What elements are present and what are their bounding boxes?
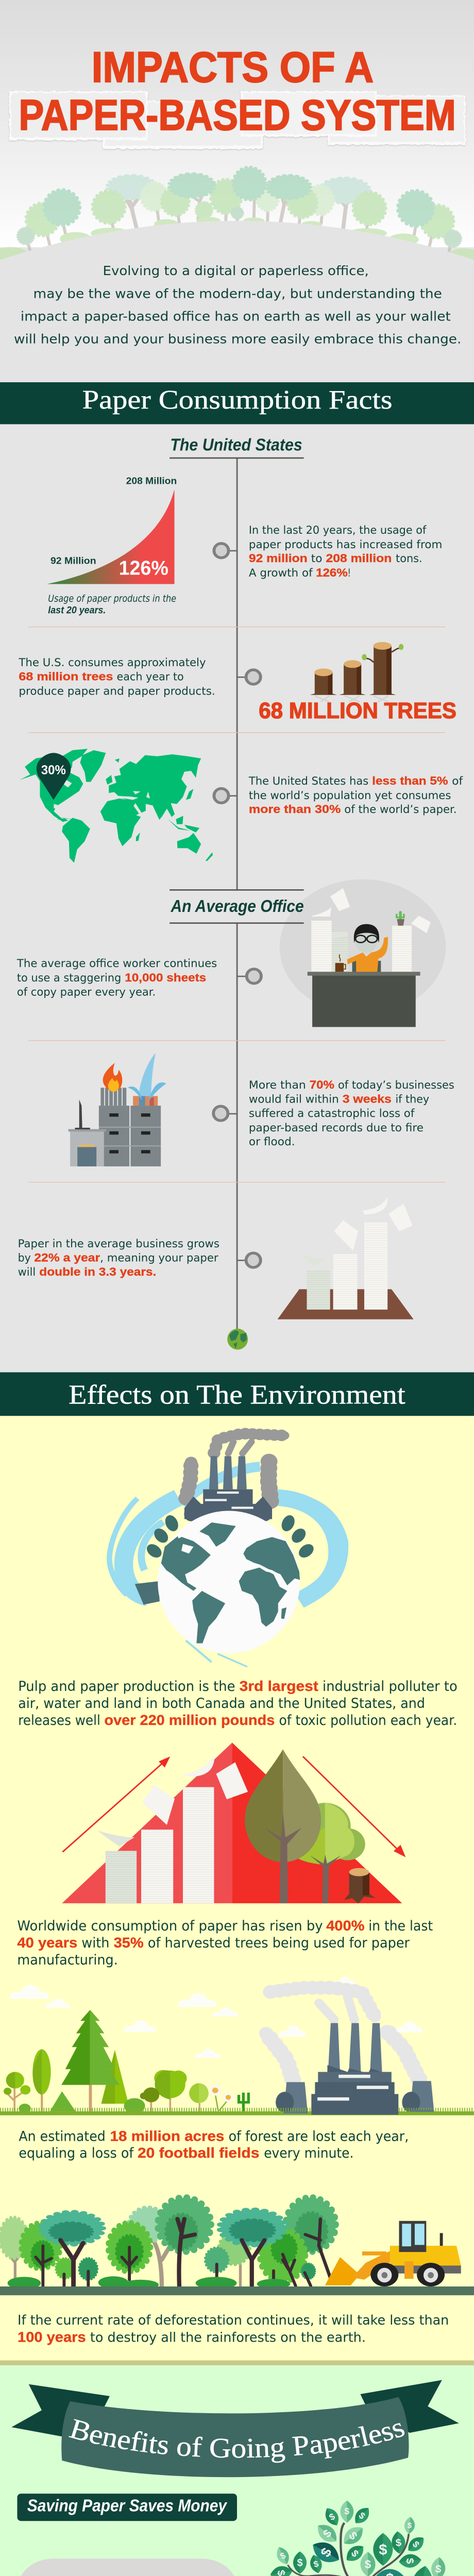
map pin: 30%: 30% — [41, 764, 66, 777]
text: usage growth: paper products has increased from — [249, 539, 442, 551]
illustration: red mountain with paper stacks and trees — [62, 1742, 405, 1904]
intro text — [14, 263, 461, 347]
text: 68 million trees — [18, 657, 215, 698]
text: rainforests — [18, 2313, 449, 2345]
text: usage growth: tons. — [396, 553, 422, 565]
banner: paper consumption facts — [0, 382, 474, 424]
banner: effects on the environment: Effects on The Environment — [69, 1380, 405, 1410]
text: business failure: 70% — [310, 1078, 334, 1091]
timeline node — [238, 969, 261, 984]
panel: effects on the environment — [0, 1329, 474, 1728]
header section — [0, 43, 474, 424]
illustration: money tree: $ — [357, 2510, 367, 2521]
illustration: money tree: $ — [312, 2558, 320, 2569]
text: usage growth: to — [311, 553, 322, 565]
text: business failure: suffered a catastrophic loss of — [249, 1108, 415, 1120]
subheading: saving paper saves money — [17, 2494, 237, 2521]
text: third largest polluter: air, water and land in both Canada and the United States, and — [18, 1696, 425, 1711]
area chart: growth 126%: 126% — [119, 556, 168, 579]
text: third largest polluter: releases well — [18, 1713, 100, 1728]
text: worldwide consumption: with — [81, 1935, 109, 1951]
intro text: Evolving to a digital or paperless office, — [103, 263, 369, 279]
illustration: forest versus factory landscape — [0, 1977, 474, 2115]
illustration: money tree: $ — [346, 2530, 360, 2542]
text: 10,000 sheets: to use a staggering — [17, 972, 121, 985]
illustration: office worker at desk — [280, 879, 446, 1027]
text: us population share: of — [452, 775, 464, 788]
text: worldwide consumption: in the last — [368, 1918, 433, 1934]
text: usage growth: In the last 20 years, the usage of — [249, 524, 427, 537]
text: paper doubles: by — [18, 1252, 31, 1264]
text: rainforests: If the current rate of deforestation continues, it will take less than — [18, 2313, 449, 2328]
torn paper strips behind title — [9, 91, 466, 149]
illustration: money tree: $ — [410, 2539, 421, 2550]
text: 10,000 sheets: The average office worker continues — [16, 958, 217, 970]
text: paper doubles: will — [18, 1266, 36, 1279]
world map — [20, 749, 213, 863]
illustration: growing paper stacks — [278, 1197, 414, 1319]
illustration: money tree: $ — [345, 2506, 350, 2516]
text: us population share: of the world’s paper. — [344, 804, 457, 816]
text: forest acres lost: every minute. — [264, 2145, 353, 2161]
panel: an average office — [16, 879, 454, 1319]
illustration: money tree: $ — [365, 2558, 371, 2571]
text: business failure: if they — [395, 1094, 429, 1106]
illustration: money tree: $ — [407, 2521, 412, 2530]
text: third largest polluter: over 220 million pounds — [104, 1713, 275, 1728]
title: IMPACTS OF A — [92, 43, 374, 91]
hill — [0, 221, 474, 386]
text: us population share — [248, 774, 464, 816]
text: us population share: the world’s population yet consumes — [249, 790, 451, 802]
text: forest acres lost: of forest are lost each year, — [229, 2129, 409, 2144]
icon: tree stumps — [310, 642, 403, 702]
illustration: money tree: $ — [404, 2557, 416, 2564]
text: forest acres lost: equaling a loss of — [19, 2145, 134, 2161]
text: us population share: less than 5% — [372, 774, 448, 787]
illustration: polluted globe — [109, 1433, 346, 1667]
text: usage growth: ! — [348, 567, 351, 580]
timeline node — [214, 789, 237, 803]
illustration: money tree: $ — [379, 2541, 387, 2558]
text: forest acres lost: 18 million acres — [110, 2129, 224, 2144]
text: worldwide consumption: 35% — [114, 1935, 144, 1951]
text: third largest polluter: 3rd largest — [240, 1679, 318, 1694]
text: third largest polluter — [18, 1679, 458, 1728]
text: usage growth: 126% — [316, 566, 348, 579]
map pin: 30% — [37, 753, 71, 800]
illustration: money tree: $ — [320, 2527, 334, 2540]
text: business failure — [249, 1078, 454, 1148]
area chart: growth 126%: 208 Million — [126, 476, 177, 486]
panel: the united states — [18, 435, 464, 863]
text: 68 million trees: produce paper and paper products. — [19, 685, 215, 698]
text: 68 million trees: each year to — [116, 671, 184, 683]
text: paper doubles: , meaning your paper — [100, 1252, 218, 1264]
ribbon: benefits of going paperless: Benefits of Going Paperless — [69, 2419, 405, 2463]
intro text: may be the wave of the modern-day, but understanding the — [33, 286, 442, 301]
text: worldwide consumption: 400% — [326, 1918, 365, 1934]
ribbon: benefits of going paperless — [11, 2380, 459, 2477]
heading: an average office: An Average Office — [171, 896, 304, 916]
illustration: money tree: $ — [349, 2548, 361, 2560]
illustration: forest and bulldozer — [0, 2198, 474, 2295]
text: third largest polluter: Pulp and paper production is the — [18, 1679, 235, 1694]
text: worldwide consumption: Worldwide consumption of paper has risen by — [17, 1918, 323, 1934]
subheading: saving paper saves money: Saving Paper Saves Money — [27, 2497, 228, 2515]
text: usage growth — [249, 524, 442, 580]
panel: consumption and forests — [0, 1742, 474, 2161]
text: paper doubles — [18, 1238, 219, 1279]
callout: recent study — [17, 2558, 238, 2576]
text: business failure: would fail within — [249, 1094, 339, 1106]
title — [19, 43, 456, 139]
text: forest acres lost — [19, 2129, 409, 2161]
banner: effects on the environment — [0, 1372, 474, 1416]
text: 68 million trees: 68 million trees — [19, 670, 113, 683]
text: 68 million trees: The U.S. consumes approximately — [18, 657, 206, 669]
panel: deforestation and benefits — [0, 2194, 474, 2576]
text: third largest polluter: industrial polluter to — [323, 1679, 458, 1694]
text: usage growth: 92 million — [249, 552, 308, 565]
text: rainforests: to destroy all the rainforests on the earth. — [90, 2330, 366, 2345]
area chart: growth 126%: Usage of paper products in the — [48, 593, 176, 604]
illustration: money tree: $ — [327, 2511, 337, 2522]
text: business failure: 3 weeks — [343, 1093, 392, 1105]
illustration: money tree — [262, 2501, 459, 2576]
text: paper doubles: double in 3.3 years. — [39, 1265, 156, 1278]
text: us population share: more than 30% — [249, 803, 341, 816]
illustration: money tree: $ — [435, 2563, 442, 2575]
text: worldwide consumption — [17, 1918, 433, 1968]
intro text: will help you and your business more easily embrace this change. — [14, 332, 461, 347]
timeline node — [238, 670, 261, 684]
text: business failure: or flood. — [249, 1136, 295, 1148]
area chart: growth 126%: last 20 years. — [48, 605, 106, 616]
illustration: money tree: $ — [297, 2557, 303, 2569]
timeline node — [213, 1106, 237, 1121]
text: 10,000 sheets — [16, 958, 217, 998]
text: business failure: of today’s businesses — [338, 1079, 454, 1092]
text: usage growth: 208 million — [326, 552, 392, 565]
illustration: money tree: $ — [395, 2537, 402, 2549]
text: business failure: More than — [249, 1079, 306, 1092]
illustration: money tree: $ — [279, 2550, 287, 2562]
area chart: growth 126%: 92 Million — [50, 555, 96, 566]
text: paper doubles: 22% a year — [34, 1251, 100, 1264]
text: worldwide consumption: 40 years — [17, 1935, 77, 1951]
text: us population share: The United States has — [248, 775, 368, 788]
heading: the united states: The United States — [170, 435, 302, 454]
icon: small globe at end of timeline — [227, 1329, 248, 1350]
pale forest on the hill — [0, 167, 474, 264]
text: worldwide consumption: of harvested trees being used for paper — [148, 1935, 410, 1951]
text: worldwide consumption: manufacturing. — [17, 1952, 118, 1968]
timeline node — [238, 1253, 261, 1267]
intro text: impact a paper-based office has on earth as well as your wallet — [21, 309, 451, 324]
illustration: fire and flood on filing cabinets — [69, 1053, 166, 1166]
banner: paper consumption facts: Paper Consumption Facts — [82, 385, 393, 414]
illustration: money tree: $ — [317, 2545, 335, 2560]
text: forest acres lost: 20 football fields — [138, 2145, 259, 2161]
timeline line — [236, 458, 238, 1330]
text: 10,000 sheets: 10,000 sheets — [125, 971, 206, 984]
text: 10,000 sheets: of copy paper every year. — [17, 986, 156, 998]
text: usage growth: A growth of — [249, 567, 313, 580]
text: rainforests: 100 years — [18, 2329, 86, 2345]
text: forest acres lost: An estimated — [19, 2129, 106, 2144]
text: business failure: paper-based records due to fire — [249, 1122, 424, 1134]
area chart: growth 126% — [47, 476, 177, 616]
timeline node — [214, 544, 237, 558]
text: paper doubles: Paper in the average business grows — [18, 1238, 219, 1250]
